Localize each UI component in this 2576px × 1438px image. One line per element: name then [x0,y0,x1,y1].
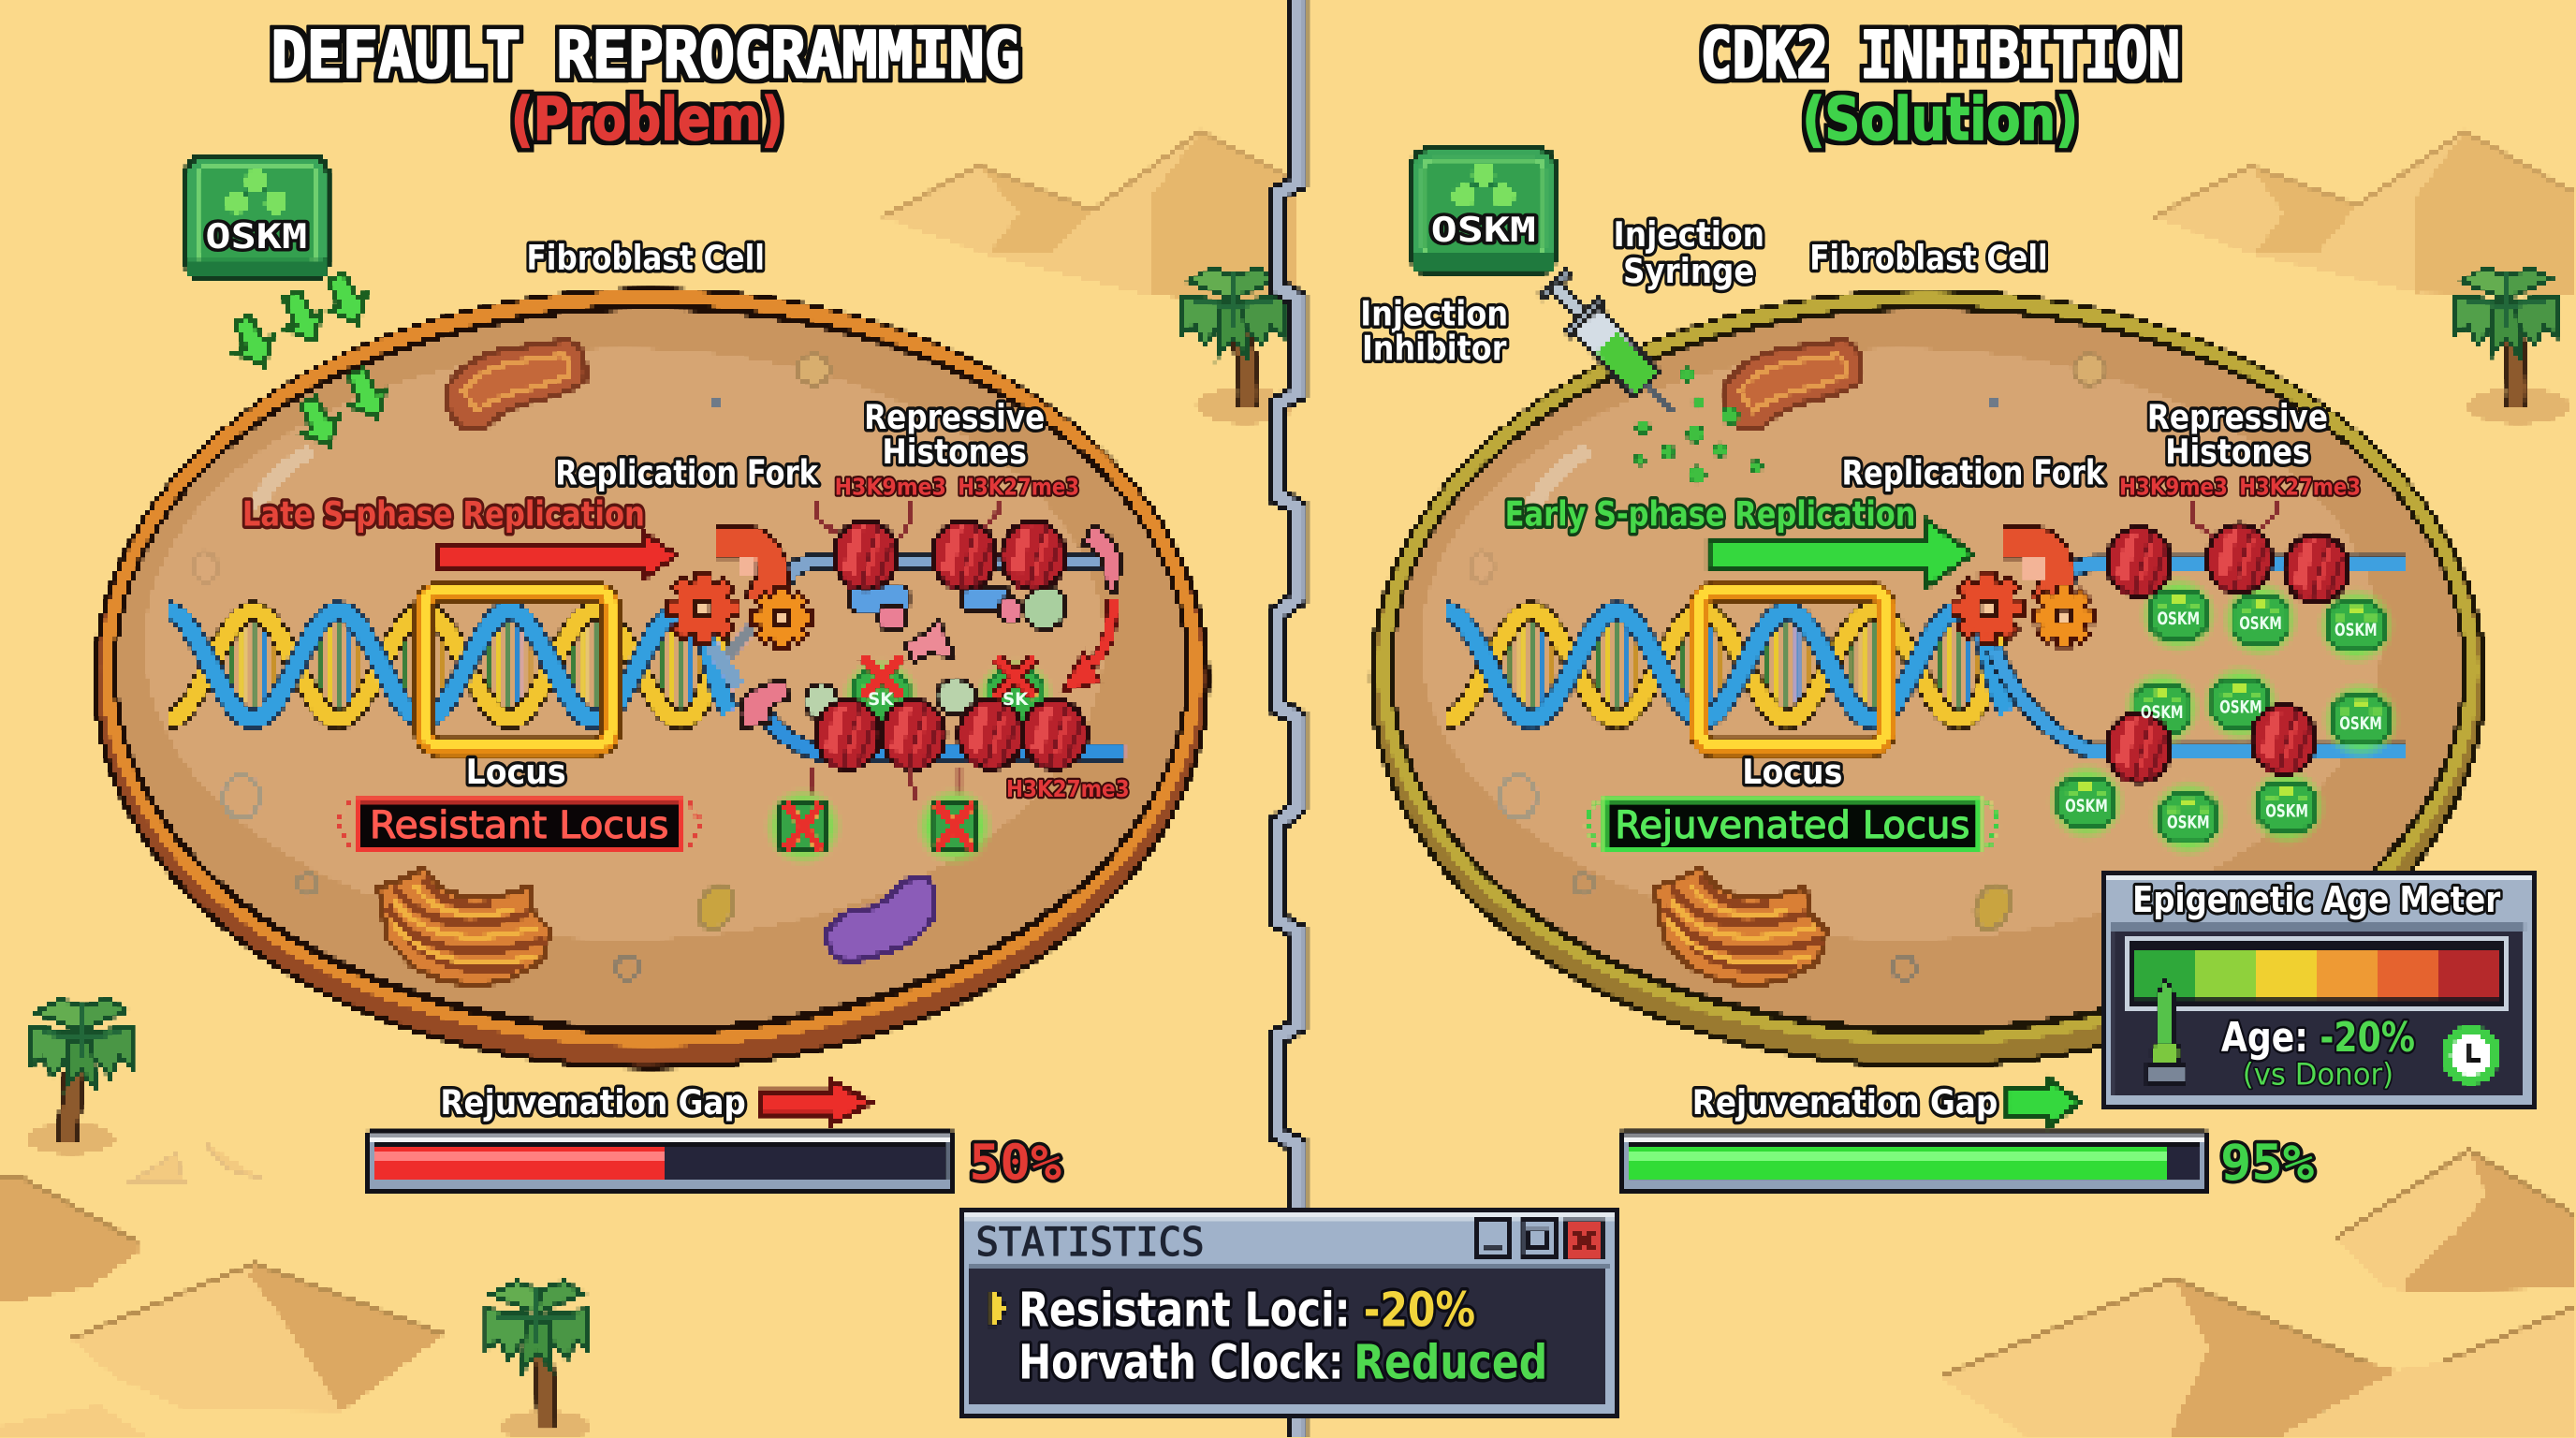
panel: epigenetic age meter [2100,871,2537,1109]
chip labels: OSKM [2157,609,2200,629]
label: rejuvenation gap: Rejuvenation Gap [1692,1082,1998,1123]
displaced factors [740,526,1120,728]
rejuvenation gap arrow right [2008,1078,2080,1127]
subtitle left: (Problem) [511,84,783,154]
label: repressive histones [864,397,1045,472]
stat: resistant loci: Resistant Loci: [1018,1283,1351,1338]
chip labels: OSKM [2167,814,2210,833]
label: injection syringe [1614,214,1764,291]
chip text: SK [1003,690,1029,710]
fibroblast cell left [93,287,1210,1070]
label: injection syringe: Injection [1614,214,1764,255]
label: repressive histones: Histones [2165,432,2310,472]
meter vs donor: (vs Donor) [2243,1058,2393,1092]
label: injection inhibitor: Inhibitor [1362,328,1507,368]
window title: STATISTICS [976,1219,1204,1265]
rejuvenation gap arrow left [759,1079,871,1125]
icon: palm tree left [26,999,131,1154]
label: injection syringe: Syringe [1623,251,1754,291]
label: locus: Locus [1742,752,1842,792]
label: rejuvenated locus: Rejuvenated Locus [1615,803,1969,847]
red curved arrow [1061,600,1112,692]
DNA helix [168,611,729,720]
strands [1995,564,2407,751]
chip text: SK [868,690,894,710]
meter frame [2100,871,2537,1109]
icon: OSKM block [1410,146,1558,276]
rejuvenation gap bar right [1618,1131,2210,1193]
locus highlight box [424,590,611,748]
panel: CDK2 inhibition (solution) [1360,18,2486,1193]
label: OSKM: OSKM [205,216,307,257]
stat: horvath clock: Reduced [1354,1336,1547,1391]
replication arrow red [437,533,677,579]
label: replication fork: Replication Fork [1841,453,2106,493]
label: replication fork: Replication Fork [555,453,819,493]
label: H3K27me3: H3K27me3 [2239,473,2361,500]
icon: palm tree top right [2454,268,2569,424]
label: rejuvenation gap: Rejuvenation Gap [440,1082,746,1123]
window button close [1566,1221,1602,1258]
label: repressive histones [2147,397,2328,472]
chip labels: OSKM [2265,801,2308,821]
rejuvenated locus badge box [1586,800,1999,851]
blocked OSKM chips [842,657,1055,736]
chip labels [2065,609,2382,833]
replication arrow green [1708,520,1973,588]
icon: syringe [1535,267,1690,428]
needle gauge [2147,981,2185,1083]
chip labels: OSKM [2239,614,2282,634]
arrows: OSKM entering cell [225,269,395,454]
stat: horvath clock: Horvath Clock: [1018,1336,1344,1391]
OSKM factors [2047,575,2400,858]
fibroblast cell right [1369,289,2486,1068]
replication fork helicase and gears [667,542,812,649]
label: H3K9me3: H3K9me3 [835,473,946,500]
histones [2107,524,2349,782]
organelles [194,340,829,986]
chip labels: OSKM [2141,703,2184,723]
histones upper [834,521,1065,590]
icon: palm tree top left panel [1181,268,1295,424]
icon: clock [2441,1025,2500,1084]
label: OSKM: OSKM [1431,210,1536,250]
panel: default reprogramming (problem) [93,18,1210,1193]
DNA helix [1445,611,2008,720]
stat: resistant loci: -20% [1364,1283,1475,1338]
chip labels: OSKM [2339,714,2382,734]
label: resistant locus: Resistant Locus [370,803,668,847]
injected inhibitor particles [1634,368,1762,483]
resistant locus badge box [339,800,700,851]
dunes: top right [2154,131,2576,296]
dunes: bottom right [1940,1151,2576,1438]
blocked OSKM chip two [915,787,994,866]
label: repressive histones: Repressive [864,397,1045,437]
histone tails [812,500,997,801]
meter age value: Age: -20% [2221,1014,2415,1062]
title right: CDK2 INHIBITION [1701,18,2180,93]
icon: OSKM block [184,153,330,283]
replication fork helicase and gears [1952,542,2094,647]
label: fibroblast cell: Fibroblast Cell [527,238,765,278]
panel: statistics window [958,1210,1618,1419]
icon: palm tree bottom [487,1282,590,1438]
blocked OSKM chip one [764,787,842,866]
label: early S-phase replication: Early S-phase Replication [1505,494,1915,535]
locus highlight box [1699,590,1886,748]
organelles [1471,340,2106,986]
window button maximize [1521,1221,1556,1258]
organelle: purple [827,877,935,961]
label: injection inhibitor: Injection [1360,294,1508,334]
center divider [1278,0,1298,1438]
meter title: Epigenetic Age Meter [2132,879,2500,921]
dunes: top left [882,131,1298,304]
chip labels: OSKM [2334,621,2378,640]
histones lower [815,700,1087,769]
histone tails [2193,501,2276,536]
label: injection inhibitor [1360,294,1508,368]
chip labels: OSKM [2065,797,2108,816]
value: 50%: 50% [970,1135,1061,1192]
title left: DEFAULT REPROGRAMMING [271,18,1020,93]
label: lower H3K27me3: H3K27me3 [1006,775,1130,802]
age color scale [2128,940,2507,1007]
rejuvenation gap bar left [365,1131,956,1193]
value: 95%: 95% [2220,1135,2314,1192]
label: H3K27me3: H3K27me3 [958,473,1079,500]
label: fibroblast cell: Fibroblast Cell [1809,238,2048,278]
label: late S-phase replication: Late S-phase Replication [242,494,645,535]
dunes: bottom left [0,1144,444,1438]
label: repressive histones: Repressive [2147,397,2328,437]
chip labels: OSKM [2219,698,2262,718]
window button minimize [1475,1221,1510,1258]
chip text [868,690,1029,710]
window frame [958,1210,1618,1419]
label: repressive histones: Histones [882,432,1027,472]
red X marks on upper chips [862,657,1035,697]
subtitle right: (Solution) [1802,84,2078,154]
label: H3K9me3: H3K9me3 [2119,473,2228,500]
label: locus: Locus [466,752,566,792]
strands [711,562,1125,753]
bullet arrow [989,1292,1007,1326]
